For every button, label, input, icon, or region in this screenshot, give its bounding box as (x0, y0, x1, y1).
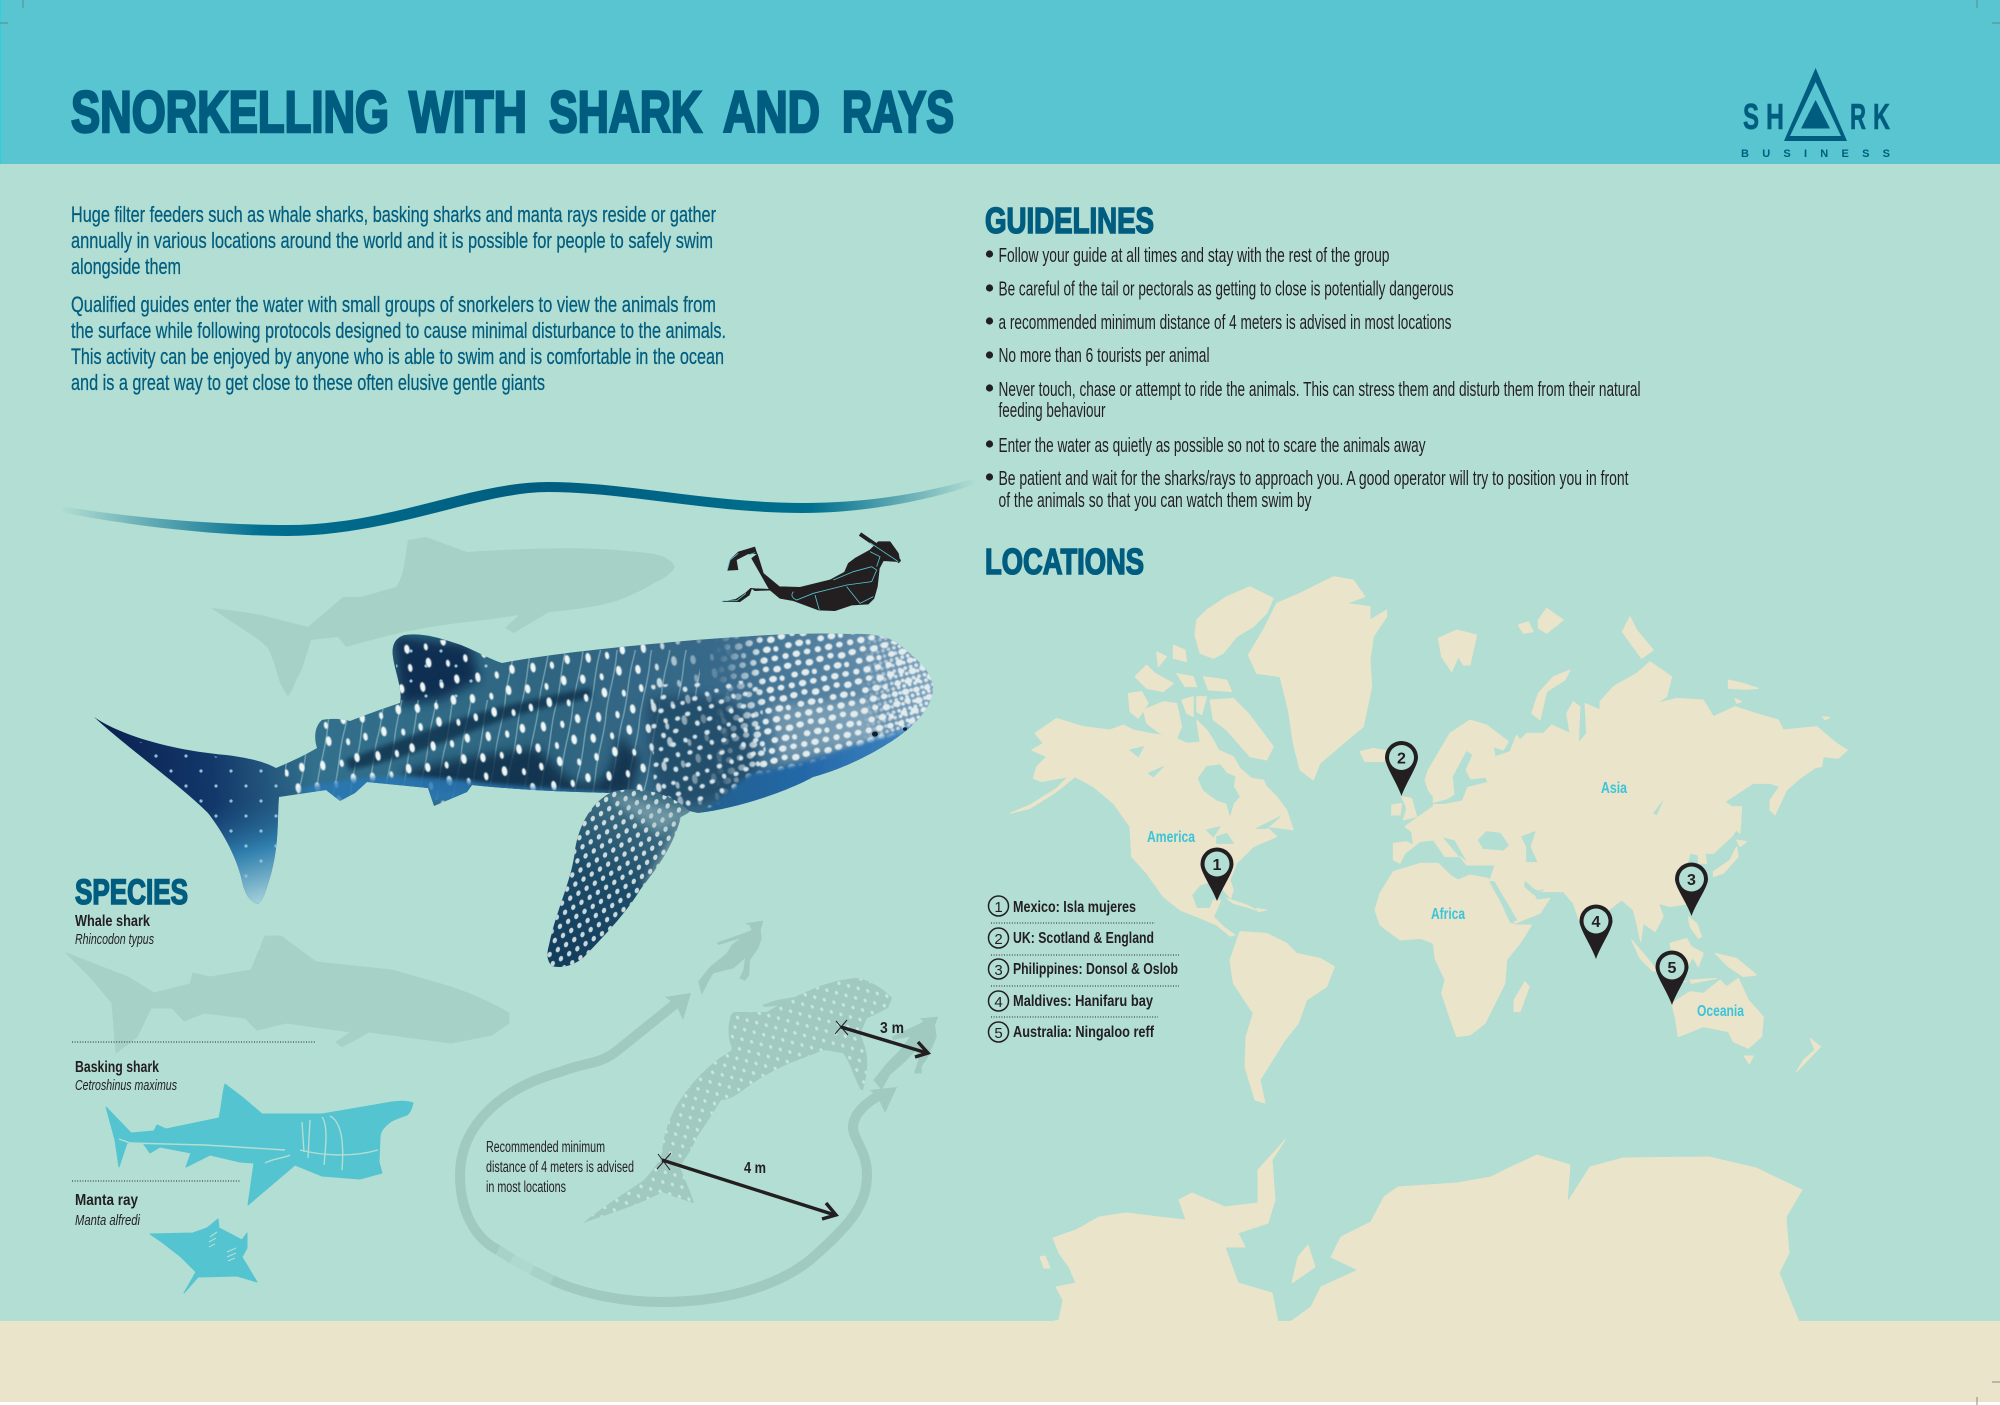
map: Africa (1375, 863, 1532, 1037)
distance arrow: 3 m (835, 1020, 928, 1057)
map: Antarctica (1050, 1140, 1802, 1322)
map: North America (1010, 718, 1293, 936)
locations legend: 2 (994, 931, 1003, 948)
continent labels: Africa (1431, 906, 1465, 923)
species: basking shark label (75, 1059, 177, 1094)
intro text: Qualified guides enter the water with small groups of snorkelers to view the animals from (71, 292, 716, 317)
guidelines list (986, 244, 1640, 512)
arrow head: towards second snorkeller (870, 1087, 897, 1113)
locations legend: Australia: Ningaloo reff (1013, 1024, 1155, 1041)
guidelines list: Enter the water as quietly as possible so not to scare the animals away (998, 434, 1426, 457)
diagram caption (486, 1139, 634, 1196)
map pin 5: 5 (1668, 960, 1677, 977)
map: Japan and Sakhalin (1713, 807, 1747, 877)
logo: Shark Business: H (1766, 96, 1784, 137)
locations legend: Maldives: Hanifaru bay (1013, 993, 1153, 1010)
logo: Shark Business: R (1850, 96, 1866, 137)
guidelines list: No more than 6 tourists per animal (998, 344, 1210, 367)
arrow head: towards first snorkeller (665, 993, 691, 1020)
diagram whale shark silhouette (580, 970, 900, 1230)
map: Australia (1672, 978, 1763, 1048)
map pin 4: 4 (1592, 914, 1601, 931)
title: RAYS (842, 80, 954, 145)
map: Canadian Arctic islands (1128, 587, 1273, 760)
species: basking shark label: Cetroshinus maximus (75, 1077, 177, 1094)
logo: Shark Business: BUSINESS (1741, 148, 1890, 160)
species: manta ray label: Manta ray (75, 1192, 138, 1209)
map: northern islands (1438, 608, 1830, 720)
species: basking shark label: Basking shark (75, 1059, 159, 1076)
ghost shark silhouette behind whale shark (211, 537, 675, 696)
species: manta ray silhouette (150, 1219, 257, 1293)
diagram caption: distance of 4 meters is advised (486, 1159, 634, 1176)
title: WITH (409, 80, 527, 145)
title: SNORKELLING (71, 80, 389, 145)
map pin 2 (1385, 741, 1418, 796)
guidelines list: Never touch, chase or attempt to ride the animals. This can stress them and disturb them from their natural (998, 378, 1640, 401)
intro text: Huge filter feeders such as whale sharks, basking sharks and manta rays reside or gather (71, 202, 716, 227)
distance label: 4 m: 4 m (744, 1160, 766, 1177)
map: Kamchatka (1770, 763, 1822, 815)
map: Antarctic ice shelf islands (1040, 1245, 1315, 1283)
map pin 4 (1580, 905, 1612, 959)
locations legend: 5 (994, 1025, 1003, 1042)
ghost snorkeller top (698, 921, 763, 995)
intro text (71, 202, 726, 395)
logo: Shark Business: S (1743, 96, 1759, 137)
map pin 3: 3 (1687, 872, 1696, 889)
whale shark pectoral fin (547, 789, 690, 967)
world map (1010, 577, 1847, 1322)
map: Eurasia (1393, 662, 1847, 942)
divider: whale shark (72, 1042, 316, 1181)
guidelines list: Be patient and wait for the sharks/rays to approach you. A good operator will try to position you in front (998, 467, 1629, 490)
species: whale shark label (75, 913, 154, 948)
map pin 1: 1 (1213, 857, 1222, 874)
species: whale shark silhouette (66, 936, 509, 1053)
map: Tasmania and New Zealand (1744, 1038, 1821, 1072)
locations legend (988, 896, 1179, 1042)
map: Eurasia, Africa and Oceania (1375, 608, 1847, 1072)
species: whale shark label: Rhincodon typus (75, 931, 154, 948)
ghost snorkeller right (873, 1017, 938, 1090)
whale shark body (94, 633, 933, 904)
guidelines list: of the animals so that you can watch them swim by (998, 489, 1312, 512)
locations legend: 3 (994, 962, 1003, 979)
whale shark illustration (94, 630, 940, 975)
locations legend: 4 (994, 994, 1003, 1011)
map pin 1 (1200, 848, 1234, 901)
intro text: and is a great way to get close to these often elusive gentle giants (71, 370, 545, 395)
continent labels: Asia (1601, 780, 1627, 797)
map pin 5 (1656, 951, 1688, 1005)
locations heading: LOCATIONS (985, 541, 1144, 582)
species: manta ray label (75, 1192, 140, 1229)
distance label: 3 m: 3 m (880, 1020, 904, 1037)
distance arrow: 4 m (657, 1153, 836, 1219)
footer band (0, 1321, 2000, 1405)
species: whale shark label: Whale shark (75, 913, 150, 930)
species heading: SPECIES (75, 873, 188, 912)
map pin 2: 2 (1397, 750, 1406, 768)
intro text: annually in various locations around the world and it is possible for people to safely swim (71, 228, 713, 253)
map pin 3 (1675, 862, 1708, 916)
logo: Shark Business: K (1873, 96, 1890, 137)
locations legend: Mexico: Isla mujeres (1013, 899, 1136, 916)
intro text: This activity can be enjoyed by anyone who is able to swim and is comfortable in the ocean (71, 344, 724, 369)
map: South America (1230, 932, 1334, 1103)
diagram: safe approach loop (460, 921, 938, 1302)
intro text: alongside them (71, 254, 181, 279)
whale shark markings (130, 630, 940, 910)
guidelines list: Be careful of the tail or pectorals as getting to close is potentially dangerous (998, 278, 1454, 300)
map: Caribbean islands (1227, 898, 1267, 912)
continent labels: America (1147, 829, 1195, 846)
title: SHARK (549, 80, 702, 145)
guidelines list: a recommended minimum distance of 4 meters is advised in most locations (998, 311, 1452, 334)
header band (0, 0, 2000, 164)
intro text: the surface while following protocols designed to cause minimal disturbance to the animals. (71, 318, 726, 343)
guidelines list: Follow your guide at all times and stay with the rest of the group (998, 244, 1390, 267)
map: UK and Ireland (1392, 797, 1417, 820)
map: Americas, Greenland and Arctic islands (1010, 577, 1417, 1103)
map: South-East Asian islands (1632, 917, 1757, 983)
map: Greenland (1248, 577, 1387, 780)
snorkeller silhouette (723, 534, 900, 611)
loop arrow path (460, 1000, 680, 1250)
continent labels (1147, 780, 1744, 1020)
species: manta ray label: Manta alfredi (75, 1212, 140, 1229)
wave: water surface line (60, 478, 976, 536)
guidelines heading: GUIDELINES (985, 200, 1154, 241)
species: basking shark silhouette (106, 1084, 413, 1205)
diagram caption: Recommended minimum (486, 1139, 605, 1156)
map: Iceland (1360, 748, 1392, 762)
title: AND (723, 80, 820, 145)
locations legend: UK: Scotland & England (1013, 930, 1154, 947)
logo: Shark Business (1741, 68, 1890, 160)
title (71, 80, 954, 145)
map: inland seas (1433, 752, 1663, 922)
map: Madagascar (1514, 982, 1529, 1012)
locations legend: 1 (994, 899, 1003, 916)
diagram caption: in most locations (486, 1179, 566, 1196)
locations legend: Philippines: Donsol & Oslob (1013, 961, 1178, 978)
map: Hudson Bay and great lakes (1130, 747, 1280, 843)
continent labels: Oceania (1697, 1003, 1744, 1020)
guidelines list: feeding behaviour (998, 399, 1106, 422)
